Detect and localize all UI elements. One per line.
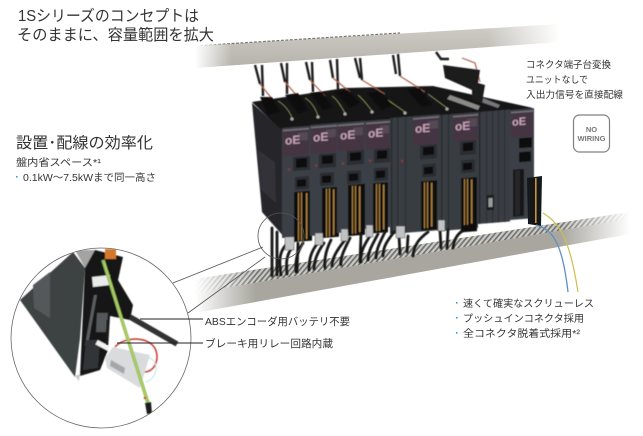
heading: installation and wiring efficiency: 設置･配線の効率化	[16, 134, 153, 152]
leader lines	[107, 319, 203, 345]
drive unit 3	[337, 121, 365, 237]
icon: no wiring: WIRING	[578, 134, 606, 143]
drive unit 8	[510, 108, 534, 220]
bottom cables	[272, 228, 462, 276]
drive unit 4	[365, 119, 391, 234]
bullet list: connector features: 全コネクタ脱着式採用*²	[463, 327, 581, 340]
small detail circle and callout lines	[173, 213, 304, 313]
drive unit 7	[478, 109, 510, 224]
drive unit 1	[282, 126, 312, 243]
icon: no wiring	[574, 115, 610, 152]
title: 1Sシリーズのコンセプトは	[18, 7, 199, 25]
drive unit 2	[310, 123, 339, 239]
white terminals	[285, 220, 445, 250]
title: そのままに、容量範囲を拡大	[17, 26, 214, 44]
text block: panel space saving	[16, 156, 156, 184]
text block: direct wiring note	[526, 59, 623, 101]
top wiring duct	[195, 24, 560, 68]
drive unit 1: oE	[285, 133, 300, 148]
side panel	[252, 103, 285, 238]
title	[17, 7, 214, 44]
drive unit 3: oE	[340, 128, 355, 143]
bottom wiring duct	[195, 212, 630, 313]
text block: direct wiring note: ユニットなしで	[526, 75, 588, 86]
label: battery-less encoder: ABSエンコーダ用バッテリ不要	[205, 315, 350, 328]
text block: direct wiring note: 入出力信号を直接配線	[526, 89, 623, 101]
drive unit 8: oE	[512, 116, 526, 129]
top surface	[252, 86, 533, 131]
drive unit 5: oE	[415, 121, 430, 136]
detached connector with wires	[527, 176, 578, 292]
bullet list: connector features	[456, 297, 594, 340]
text block: panel space saving: 盤内省スペース*¹	[16, 156, 102, 169]
text block: direct wiring note: コネクタ端子台変換	[526, 59, 611, 71]
drive unit 6	[440, 112, 478, 234]
drive unit 6: oE	[455, 119, 470, 134]
drive unit 4: oE	[368, 126, 383, 141]
label: brake relay: ブレーキ用リレー回路内蔵	[205, 337, 334, 350]
drive unit 5	[390, 114, 440, 234]
magnified detail circle	[11, 248, 191, 428]
top connectors and wires	[255, 52, 485, 121]
text block: panel space saving: 0.1kW～7.5kWまで同一高さ	[23, 171, 156, 184]
bullet list: connector features: プッシュインコネクタ採用	[463, 312, 584, 325]
bullet list: connector features: 速くて確実なスクリューレス	[463, 297, 594, 310]
servo drive rack	[252, 86, 534, 243]
icon: no wiring: NO	[586, 125, 597, 134]
drive unit 2: oE	[313, 130, 328, 145]
